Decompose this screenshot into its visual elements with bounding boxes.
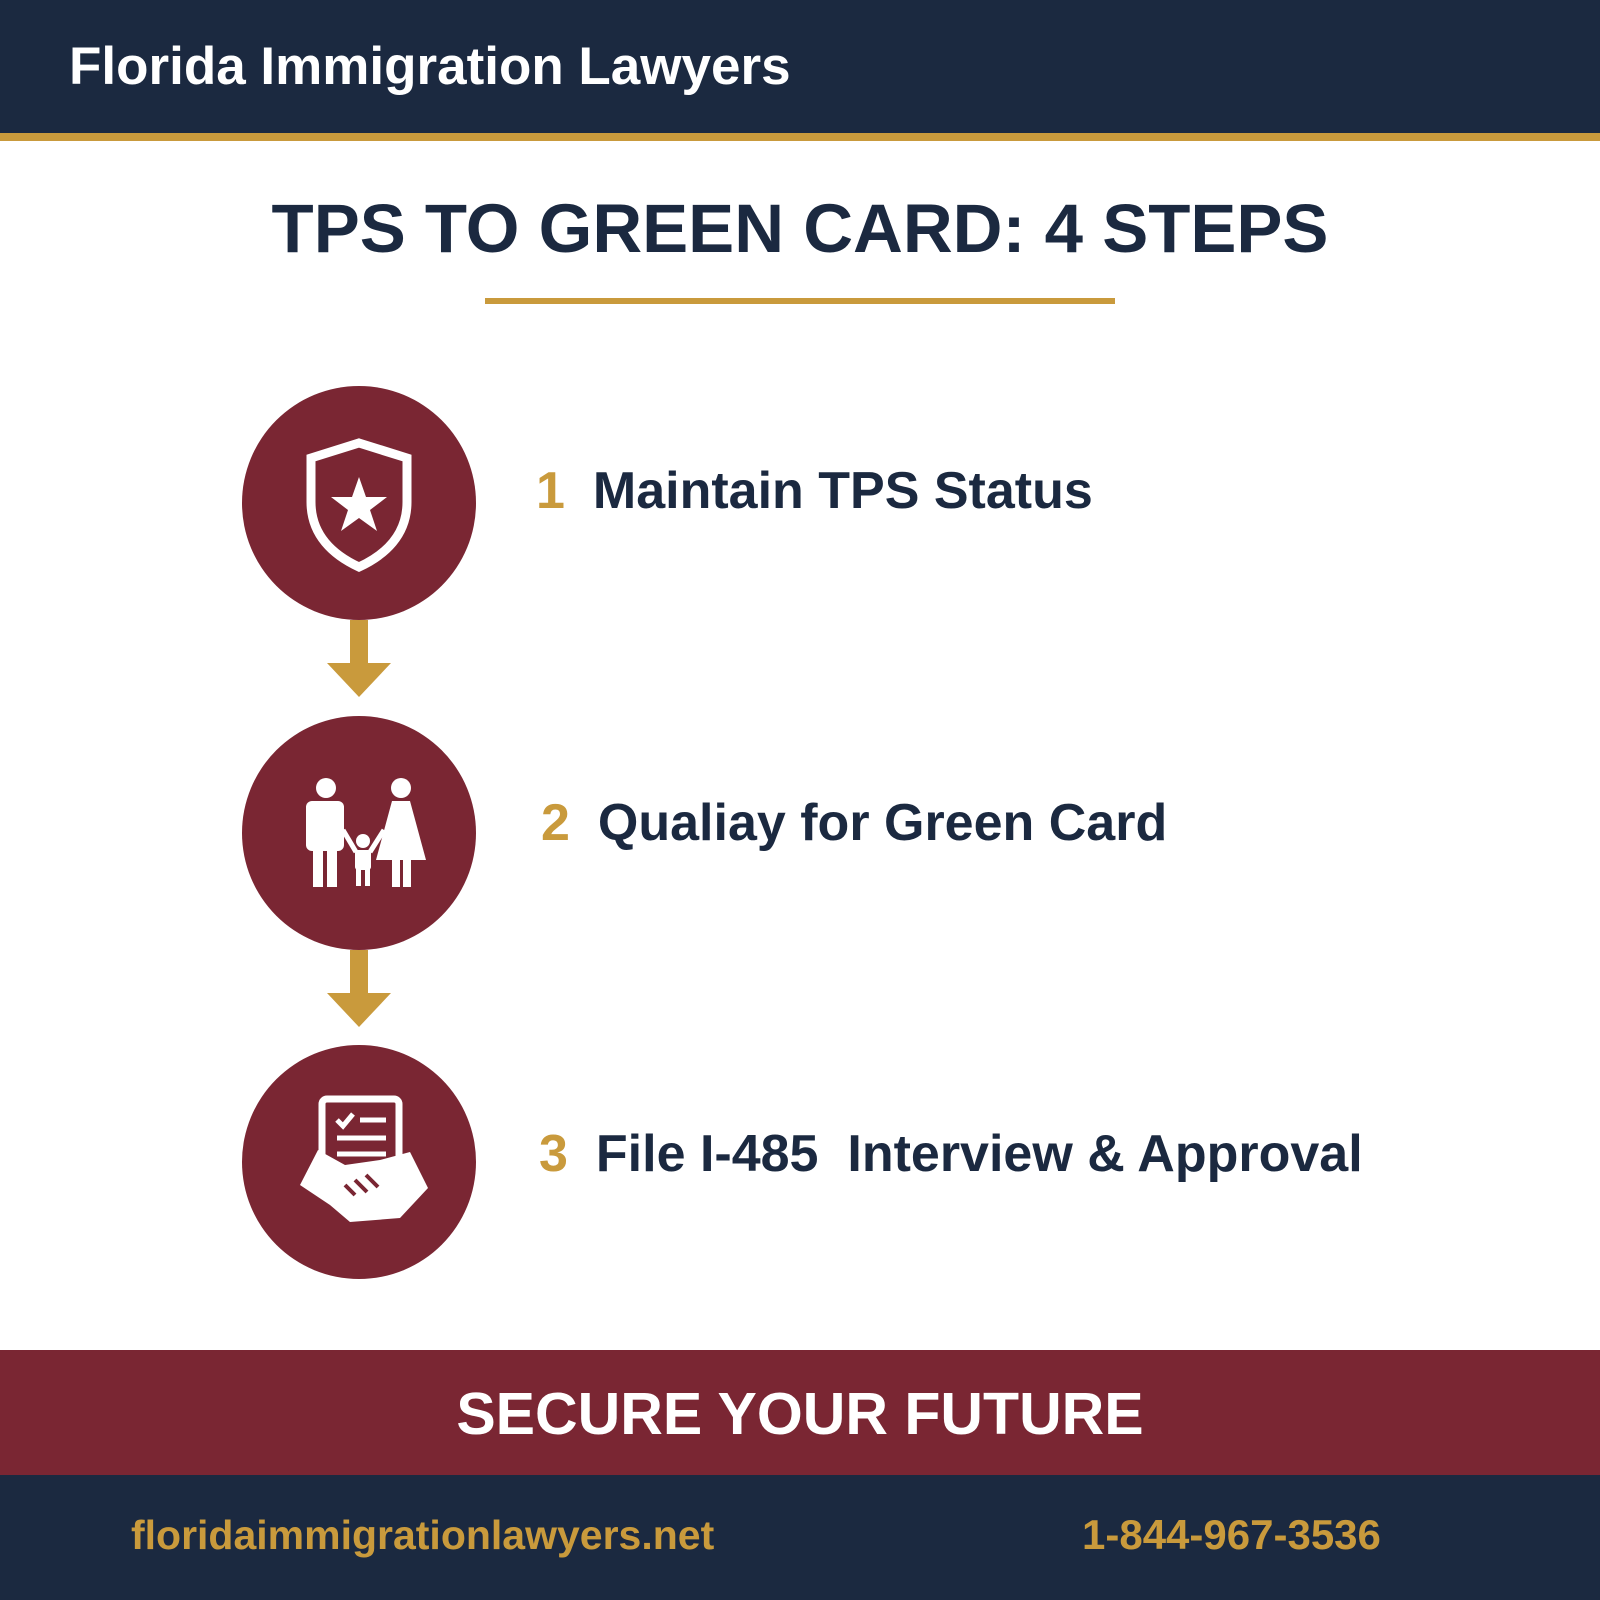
header bar — [0, 0, 1600, 133]
arrow 2 — [327, 950, 391, 1027]
website: floridaimmigrationlawyers.net — [131, 1512, 714, 1558]
banner: secure your future — [0, 1350, 1600, 1475]
arrow 1 — [327, 620, 391, 697]
phone: 1-844-967-3536 — [1082, 1511, 1381, 1558]
title: TPS TO GREEN CARD: 4 STEPS — [272, 190, 1328, 267]
step 3 icon: document handshake — [242, 1045, 476, 1279]
banner: secure your future: SECURE YOUR FUTURE — [456, 1381, 1144, 1447]
step 1 text: 1 Maintain TPS Status — [536, 462, 1093, 520]
header brand text: Florida Immigration Lawyers — [69, 37, 791, 96]
footer — [0, 1475, 1600, 1600]
step 2 icon: family — [242, 716, 476, 950]
step 3 text: 3 File I-485 Interview & Approval — [539, 1125, 1363, 1183]
step 1 icon: shield — [242, 386, 476, 620]
step 2 text: 2 Qualiay for Green Card — [541, 794, 1167, 852]
